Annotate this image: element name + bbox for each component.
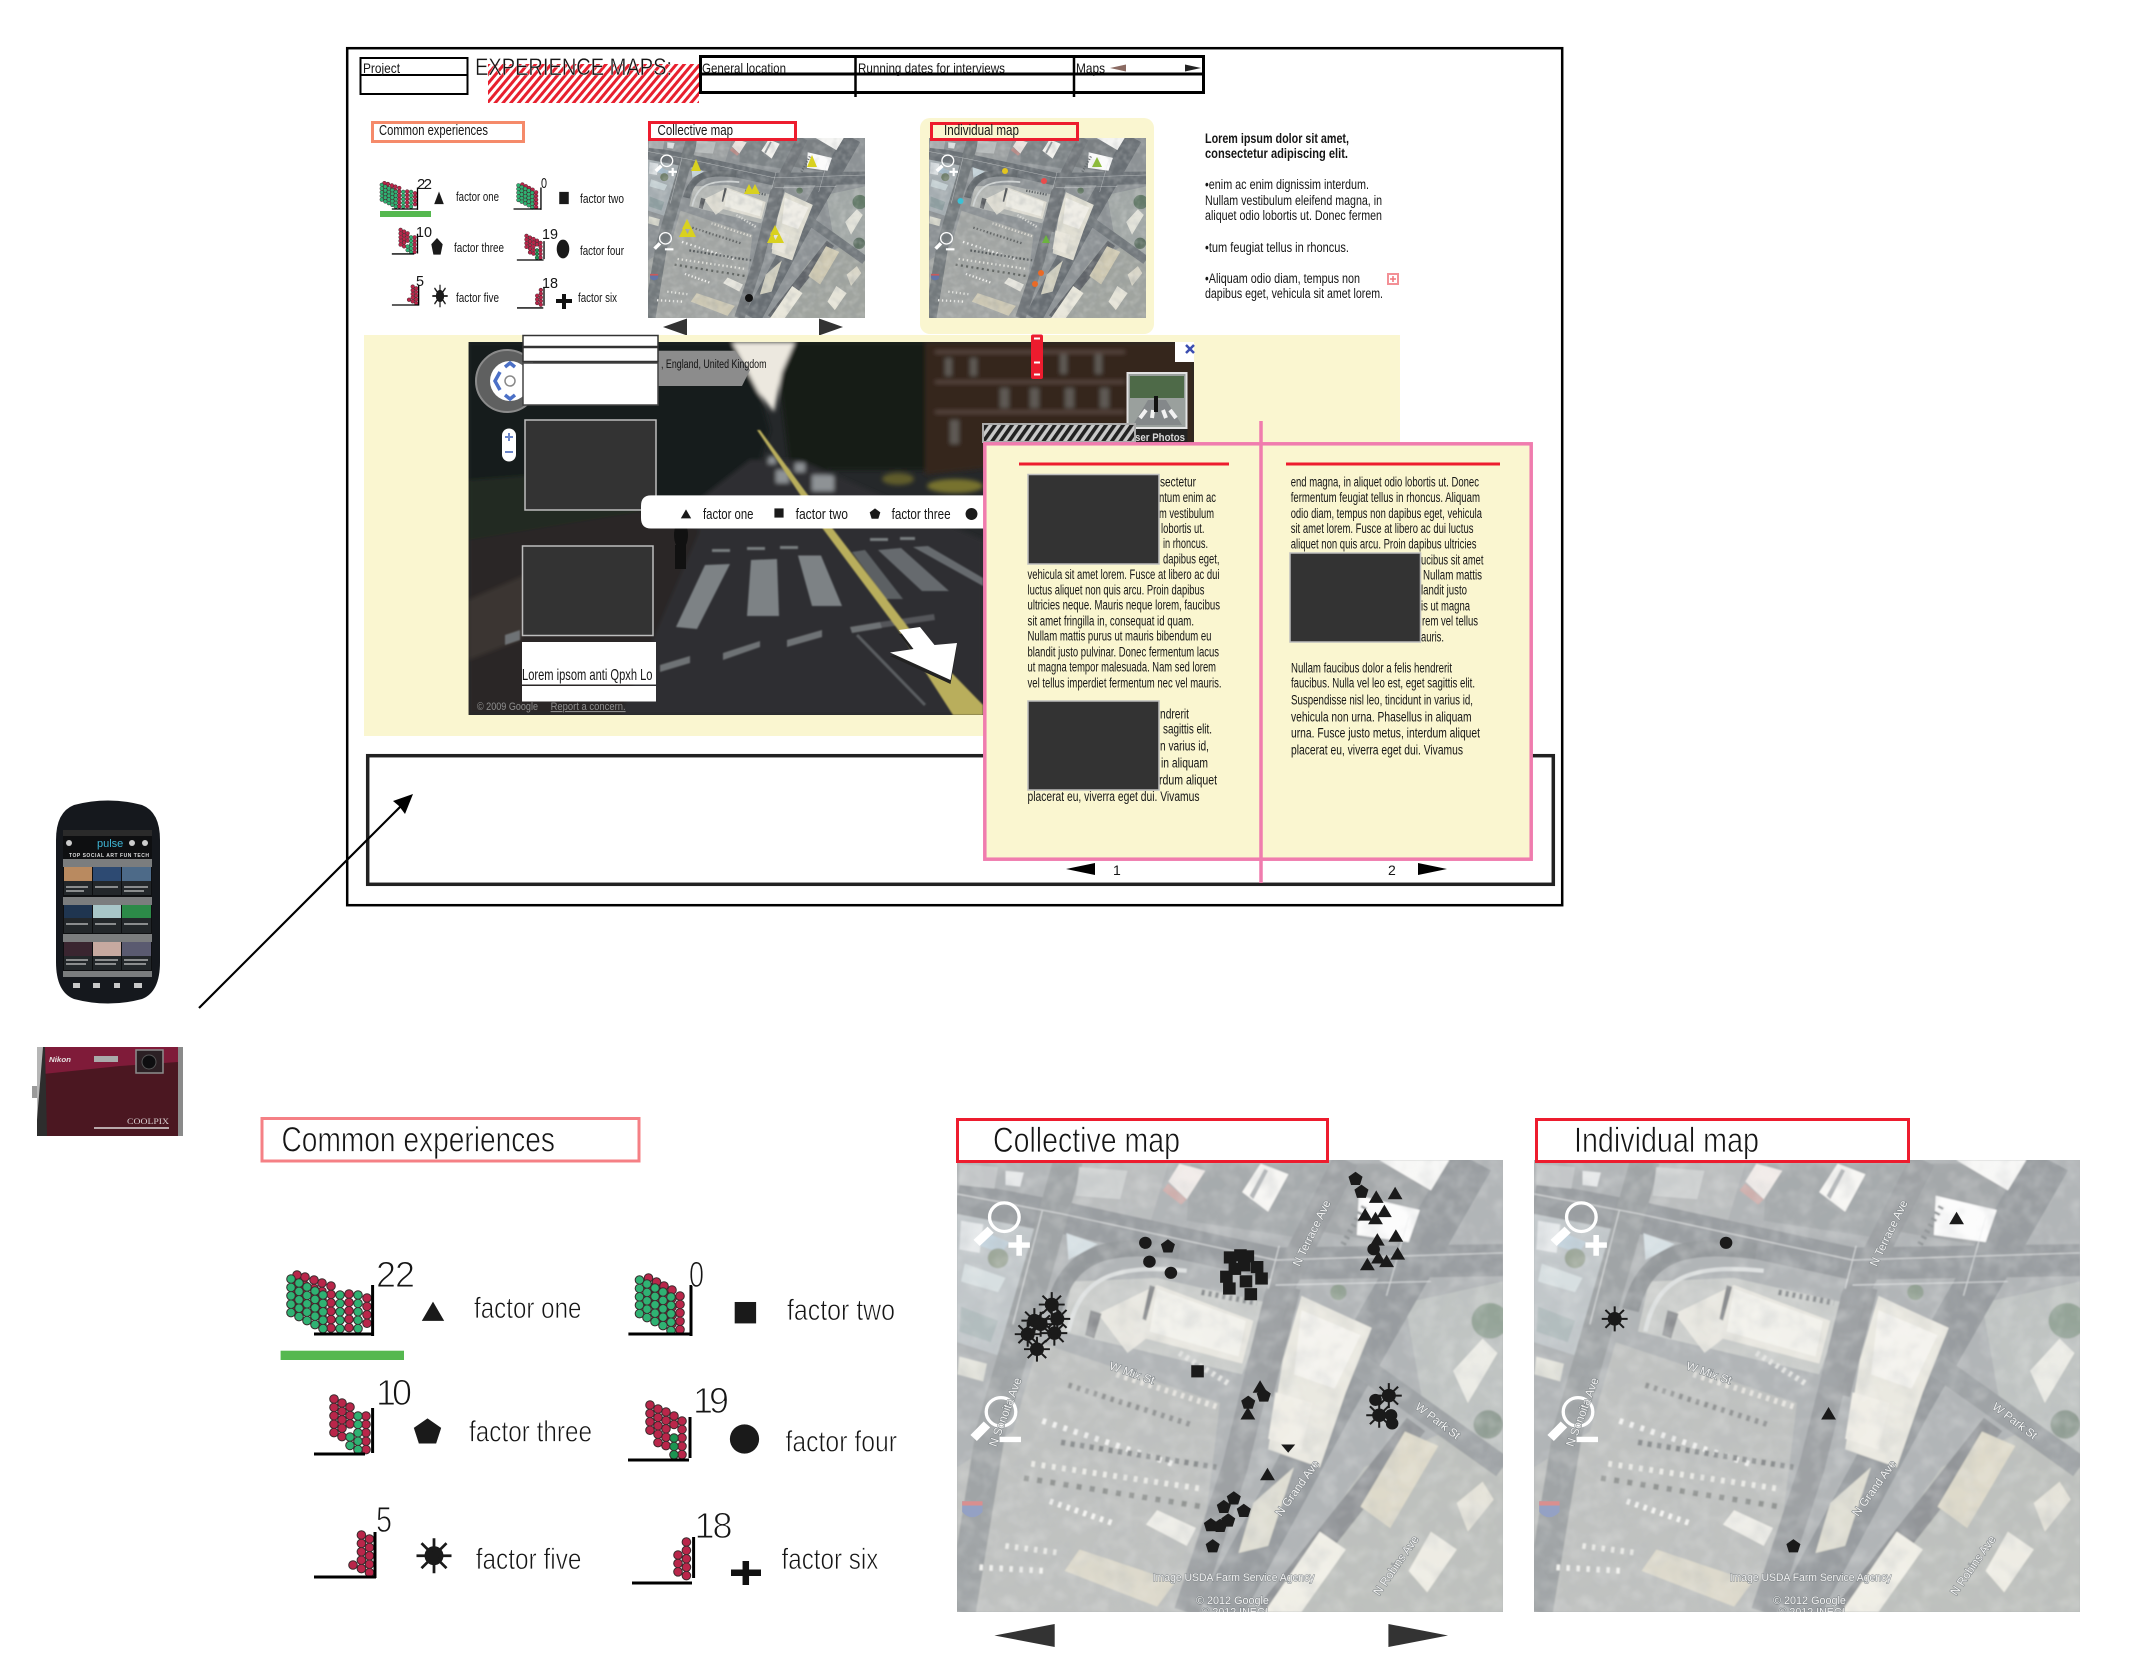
user photo thumbnail	[1128, 373, 1188, 444]
small factor one: factor one	[456, 190, 499, 204]
small collective map: Collective map	[658, 123, 733, 139]
right page text: is ut magna	[1421, 598, 1470, 614]
individual map heading: Individual map	[1574, 1121, 1759, 1160]
street labels: N Sonoita Ave	[987, 1376, 1025, 1448]
factor one stack and label	[281, 1254, 582, 1360]
text block: introduction: •Aliquam odio diam, tempus non	[1205, 271, 1360, 286]
street view scene	[468, 342, 1194, 715]
left page text: rdum aliquet	[1159, 772, 1217, 788]
collective map	[957, 1120, 1509, 1647]
street labels: © 2012 INEGI	[1779, 1606, 1845, 1618]
factor four stack and label: factor four	[786, 1426, 897, 1459]
panel: small individual map	[920, 118, 1154, 334]
decorative hatch behind title	[488, 64, 699, 103]
left page text: sagittis elit.	[1163, 722, 1212, 736]
icon: mobile phone	[56, 800, 160, 1004]
left page text: lobortis ut.	[1161, 521, 1204, 536]
factor one stack and label: factor one	[474, 1292, 582, 1325]
right page text: auris.	[1421, 630, 1444, 644]
header table: location, dates, maps: General location	[702, 60, 786, 76]
factor six stack and label: factor six	[782, 1543, 878, 1576]
left page text: ndrerit	[1160, 706, 1189, 722]
factor two stack and label	[628, 1254, 895, 1336]
street labels: N Sonoita Ave	[1564, 1376, 1602, 1448]
panel: small individual map: Individual map	[944, 123, 1019, 139]
street labels: W Mix St	[1107, 1360, 1157, 1387]
street view scene: Report a concern.	[551, 701, 626, 713]
close icon	[1175, 342, 1194, 362]
location label	[658, 351, 766, 386]
small factor two: factor two	[580, 192, 624, 206]
small factor one	[380, 176, 499, 217]
small factor four: factor four	[580, 244, 624, 258]
small factor one: 22	[417, 176, 432, 193]
small factor six: 18	[542, 275, 558, 292]
street labels	[1564, 1198, 2040, 1618]
left page text: in rhoncus.	[1163, 536, 1208, 551]
overlay column of white and dark boxes: Lorem ipsom anti Qpxh Lo	[522, 667, 653, 684]
left page text: sectetur	[1160, 474, 1196, 490]
left page text: placerat eu, viverra eget dui. Vivamus	[1028, 789, 1200, 804]
street labels: © 2012 Google	[1773, 1594, 1846, 1607]
right page text: faucibus. Nulla vel leo est, eget sagittis elit.	[1291, 676, 1475, 690]
factor two stack and label: 0	[689, 1254, 704, 1295]
header table: location, dates, maps: Maps	[1076, 60, 1105, 76]
left page text: vel tellus imperdiet fermentum nec vel mauris.	[1028, 676, 1222, 690]
individual map heading	[1534, 1120, 2080, 1620]
right page text: ucibus sit amet	[1421, 552, 1484, 568]
street labels: W Park St	[1989, 1400, 2040, 1443]
heading: common experiences: Common experiences	[282, 1120, 555, 1160]
right page image	[1290, 553, 1420, 642]
text block: introduction	[1205, 131, 1383, 301]
small factor two	[514, 175, 624, 210]
right page text: aliquet non quis arcu. Proin dapibus ultricies	[1291, 536, 1477, 552]
small factor three	[392, 224, 504, 255]
factor five stack and label: 5	[376, 1499, 392, 1540]
small factor five: factor five	[456, 291, 499, 305]
header table: location, dates, maps	[700, 56, 1204, 97]
header table: location, dates, maps: Running dates for interviews	[858, 60, 1005, 76]
left page text: vehicula sit amet lorem. Fusce at libero ac dui	[1028, 567, 1220, 582]
left page text: sit amet fringilla in, consequat id quam.	[1028, 614, 1194, 628]
panel: open book	[985, 421, 1531, 883]
right page text: rem vel tellus	[1422, 614, 1478, 628]
left page images	[1028, 474, 1159, 790]
right page text: urna. Fusce justo metus, interdum aliquet	[1291, 726, 1480, 740]
left page text: blandit justo pulvinar. Donec fermentum lacus	[1028, 644, 1219, 660]
icon: mobile phone: TOP SOCIAL ART FUN TECH	[69, 853, 149, 859]
icon: expand plus	[1388, 274, 1398, 284]
page navigation	[1066, 862, 1447, 878]
street labels: W Mix St	[1684, 1360, 1734, 1387]
left page text: in aliquam	[1161, 756, 1208, 770]
factor two stack and label: factor two	[787, 1294, 895, 1327]
street labels	[987, 1198, 1463, 1618]
left page text	[1028, 474, 1222, 804]
icon: digital camera: Nikon	[49, 1057, 71, 1064]
small factor three: 10	[416, 224, 432, 241]
street view navigation control	[476, 350, 538, 412]
right page text	[1291, 474, 1484, 758]
small collective map	[648, 122, 867, 336]
right page text: placerat eu, viverra eget dui. Vivamus	[1291, 742, 1463, 758]
left page text: ntum enim ac	[1159, 490, 1216, 505]
right page text: odio diam, tempus non dapibus eget, vehicula	[1291, 506, 1482, 521]
small factor five: 5	[416, 273, 424, 290]
individual map	[1534, 1120, 2086, 1620]
collective map heading	[958, 1120, 1328, 1162]
street labels: Image USDA Farm Service Agency	[1730, 1571, 1892, 1584]
right page text: end magna, in aliquet odio lobortis ut. Donec	[1291, 474, 1479, 490]
small factor four	[517, 226, 624, 260]
text block: introduction: •enim ac enim dignissim interdum.	[1205, 177, 1369, 192]
left page text: m vestibulum	[1159, 506, 1214, 521]
factor six stack and label: 18	[694, 1505, 732, 1546]
project box: Project	[363, 60, 400, 76]
right page text: Suspendisse nisl leo, tincidunt in varius id,	[1291, 692, 1473, 708]
text block: introduction: Lorem ipsum dolor sit amet,	[1205, 131, 1349, 146]
collective map markers	[1015, 1172, 1405, 1552]
small heading: common experiences: Common experiences	[379, 123, 488, 139]
text block: introduction: dapibus eget, vehicula sit amet lorem.	[1205, 286, 1383, 301]
factor legend bar over street view: factor one	[703, 506, 754, 523]
factor four stack and label	[628, 1380, 897, 1460]
individual map markers	[1602, 1212, 1964, 1552]
icon: digital camera	[32, 1047, 183, 1136]
arrow: devices to experience map	[199, 794, 413, 1008]
factor five stack and label: factor five	[476, 1543, 582, 1576]
location label: , England, United Kingdom	[661, 359, 766, 371]
text block: introduction: Nullam vestibulum eleifend magna, in	[1205, 193, 1382, 208]
small legend: factor counts	[380, 175, 624, 309]
left page text: ultricies neque. Mauris neque lorem, faucibus	[1028, 598, 1220, 612]
left page text: n varius id,	[1160, 738, 1209, 754]
street labels: N Terrace Ave	[1867, 1198, 1911, 1268]
factor five stack and label	[314, 1499, 582, 1578]
small factor five	[392, 273, 499, 307]
collective map heading: Collective map	[993, 1121, 1180, 1160]
hatched bar	[983, 424, 1135, 442]
map navigation arrows	[957, 1612, 1503, 1647]
left page text: luctus aliquet non quis arcu. Proin dapibus	[1028, 582, 1205, 598]
panel: bottom frame	[368, 756, 1553, 884]
right page text: sit amet lorem. Fusce at libero ac dui luctus	[1291, 521, 1474, 536]
street labels: N Robins Ave	[1371, 1534, 1422, 1598]
small factor three: factor three	[454, 241, 504, 255]
left page text: ut magna tempor malesuada. Nam sed lorem	[1028, 660, 1216, 674]
factor legend bar over street view: factor three	[892, 506, 951, 523]
icon: digital camera: COOLPIX	[127, 1117, 169, 1126]
factor legend bar over street view: factor two	[796, 506, 848, 523]
small factor six	[517, 275, 618, 309]
red handle	[1031, 334, 1043, 379]
text block: introduction: consectetur adipiscing elit.	[1205, 146, 1348, 161]
small factor four: 19	[542, 226, 558, 243]
left page text: Nullam mattis purus ut mauris bibendum eu	[1028, 628, 1212, 644]
street labels: N Grand Ave	[1273, 1458, 1322, 1519]
street labels: © 2012 INEGI	[1202, 1606, 1268, 1618]
project box	[360, 58, 468, 94]
factor six stack and label	[632, 1505, 878, 1585]
factor three stack and label: factor three	[469, 1416, 592, 1449]
street labels: © 2012 Google	[1196, 1594, 1269, 1607]
factor legend bar over street view	[641, 495, 990, 528]
text block: introduction: •tum feugiat tellus in rhoncus.	[1205, 240, 1349, 255]
street labels: N Robins Ave	[1948, 1534, 1999, 1598]
title: EXPERIENCE MAPS:	[475, 54, 672, 81]
right page text: landit justo	[1421, 582, 1467, 598]
user photo thumbnail: ser Photos	[1135, 432, 1185, 444]
small factor two: 0	[541, 175, 547, 192]
street view scene: © 2009 Google	[477, 701, 538, 713]
right page text: Nullam mattis	[1423, 568, 1482, 582]
icon: mobile phone: pulse	[97, 838, 123, 850]
small factor six: factor six	[578, 291, 618, 305]
page navigation: 1	[1113, 862, 1121, 878]
factor three stack and label	[314, 1372, 592, 1454]
text block: introduction: aliquet odio lobortis ut. Donec fermen	[1205, 208, 1382, 223]
factor one stack and label: 22	[376, 1254, 415, 1295]
right page text: Nullam faucibus dolor a felis hendrerit	[1291, 660, 1452, 676]
right page text: vehicula non urna. Phasellus in aliquam	[1291, 710, 1472, 724]
panel: experience maps page frame	[347, 48, 1562, 905]
street labels: N Terrace Ave	[1290, 1198, 1334, 1268]
street labels: N Grand Ave	[1850, 1458, 1899, 1519]
street labels: Image USDA Farm Service Agency	[1153, 1571, 1315, 1584]
right page text: fermentum feugiat tellus in rhoncus. Aliquam	[1291, 490, 1480, 505]
panel: street view background	[364, 335, 1400, 736]
page navigation: 2	[1388, 862, 1396, 878]
factor three stack and label: 10	[376, 1372, 412, 1413]
street labels: W Park St	[1412, 1400, 1463, 1443]
left page text: dapibus eget,	[1163, 552, 1220, 566]
factor four stack and label: 19	[693, 1380, 729, 1421]
overlay column of white and dark boxes	[522, 336, 658, 702]
street view zoom control	[502, 428, 516, 462]
